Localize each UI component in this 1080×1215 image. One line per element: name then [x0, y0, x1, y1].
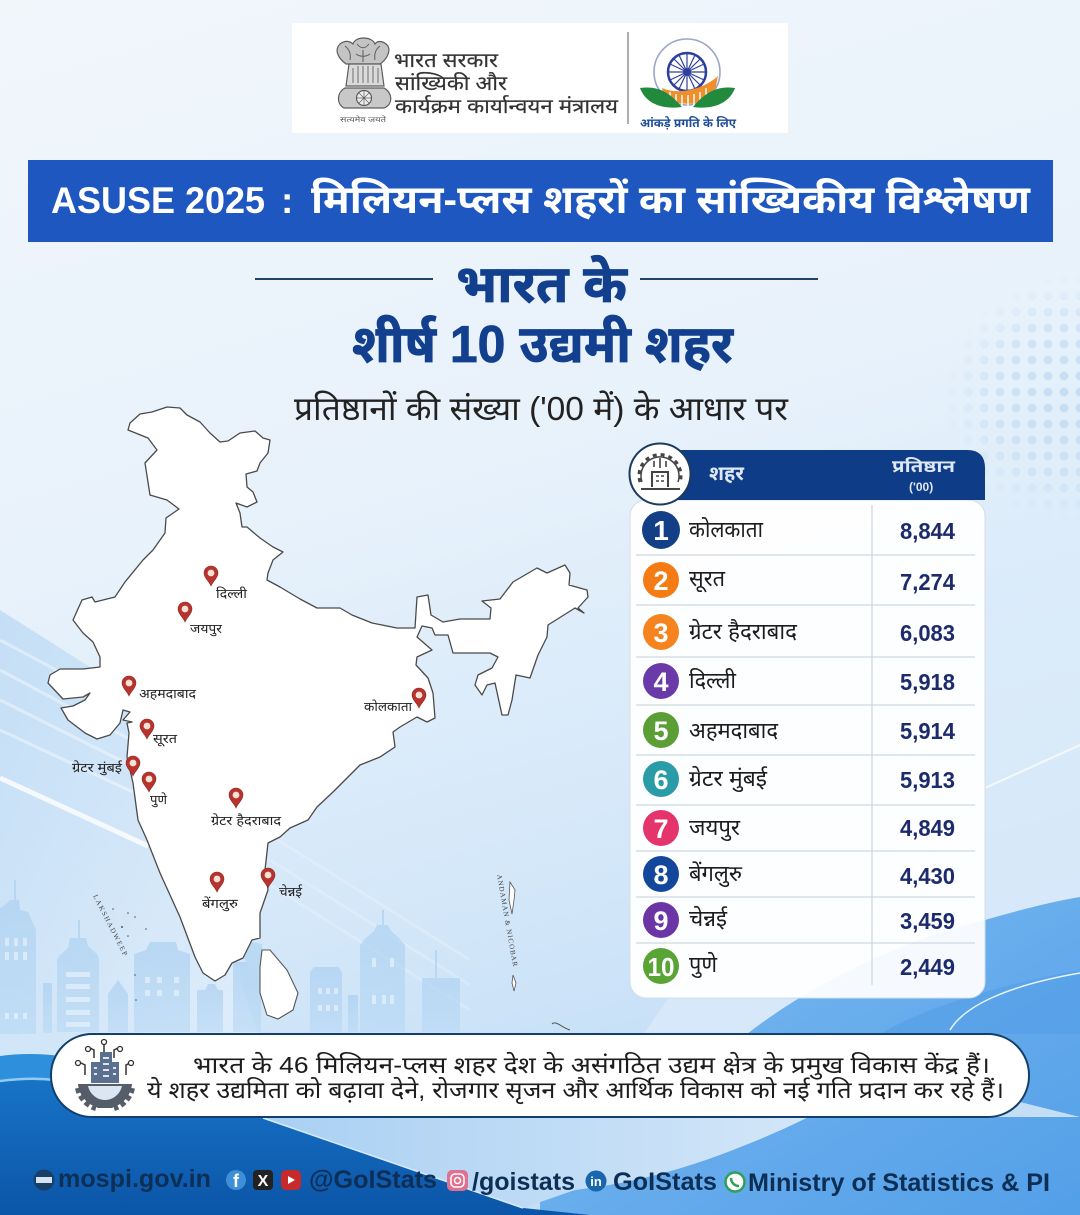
title banner: मिलियन-प्लस शहरों का सांख्यिकीय विश्लेषण	[311, 178, 1031, 222]
icon: smart city gear	[76, 1040, 134, 1108]
mainland outline	[48, 407, 588, 981]
main heading: भारत के	[456, 255, 628, 314]
row: Jaipur: 7	[653, 814, 669, 844]
row: Ahmedabad: अहमदाबाद	[689, 718, 778, 743]
Andaman label: ANDAMAN & NICOBAR	[495, 874, 519, 968]
city labels: ग्रेटर मुंबई	[72, 760, 123, 776]
table header	[670, 450, 985, 500]
row: Surat: सूरत	[689, 566, 725, 593]
icon: linkedin: in	[590, 1174, 602, 1189]
row: Delhi	[643, 663, 955, 699]
row: Greater Hyderabad: 3	[653, 618, 669, 648]
table card	[630, 500, 985, 998]
row: Delhi: 4	[653, 667, 669, 697]
header logo strip	[292, 23, 788, 133]
Andaman islands	[509, 882, 516, 991]
table header: प्रतिष्ठान	[892, 456, 956, 476]
social footer: mospi.gov.in	[58, 1165, 211, 1193]
callout text: भारत के 46 मिलियन-प्लस शहर देश के असंगठित उद्यम क्षेत्र के प्रमुख विकास केंद्र हैं।	[193, 1052, 990, 1080]
city labels: कोलकाता	[364, 699, 413, 714]
row: Delhi: 5,918	[900, 669, 955, 695]
row: Jaipur: 4,849	[900, 815, 955, 841]
social footer: Ministry of Statistics & PI	[748, 1169, 1050, 1197]
icon: facebook	[226, 1170, 246, 1191]
icon: whatsapp	[726, 1172, 744, 1192]
row: Greater Hyderabad: ग्रेटर हैदराबाद	[689, 618, 797, 644]
skyline windows	[5, 938, 394, 1027]
emblem motto: सत्यमेव जयते	[340, 115, 387, 124]
row: Surat: 7,274	[900, 569, 955, 595]
city labels: अहमदाबाद	[139, 686, 197, 701]
row: Greater Mumbai	[643, 761, 955, 797]
city labels: बेंगलुरु	[202, 896, 238, 912]
row: Greater Mumbai: 5,913	[900, 767, 955, 793]
skyline	[0, 880, 460, 1034]
callout text: ये शहर उद्यमिता को बढ़ावा देने, रोजगार सृजन और आर्थिक विकास को नई गति प्रदान कर रहे हैं।	[147, 1077, 1004, 1105]
city labels	[72, 586, 413, 912]
Palk strait patch	[244, 942, 262, 975]
row: Surat: 2	[653, 566, 669, 596]
row: Kolkata: 1	[653, 515, 669, 546]
city labels: सूरत	[153, 731, 178, 747]
social footer: GoIStats	[613, 1168, 717, 1196]
logo tagline: आंकड़े प्रगति के लिए	[640, 115, 737, 130]
title banner: :	[281, 180, 293, 221]
icon: web	[34, 1170, 54, 1190]
background	[0, 292, 1080, 1215]
social footer: /goistats	[472, 1168, 575, 1196]
row: Chennai	[643, 902, 955, 938]
row: Ahmedabad: 5,914	[900, 718, 955, 744]
row: Chennai: 3,459	[900, 908, 955, 934]
table header: ('00)	[909, 480, 933, 494]
Sri Lanka	[260, 950, 298, 1019]
row: Delhi: दिल्ली	[689, 668, 736, 693]
row: Kolkata: कोलकाता	[689, 517, 763, 542]
row: Surat	[643, 562, 955, 598]
row: Pune: 2,449	[900, 954, 955, 980]
title banner	[28, 160, 1053, 242]
row: Pune: पुणे	[689, 951, 718, 979]
row: Greater Mumbai: 6	[653, 765, 669, 795]
ministry name: भारत सरकार	[394, 50, 499, 72]
row: Greater Hyderabad	[643, 614, 955, 650]
city labels: पुणे	[150, 792, 168, 808]
row: Greater Mumbai: ग्रेटर मुंबई	[689, 765, 768, 793]
icon: X	[253, 1170, 273, 1190]
takeaway callout	[51, 1034, 1029, 1117]
social footer	[34, 1165, 1050, 1197]
row: Ahmedabad	[643, 712, 955, 748]
city pins	[122, 566, 426, 892]
row: Chennai: 9	[653, 906, 669, 936]
main heading	[255, 255, 818, 374]
icon: MoSPI wheel logo	[640, 39, 735, 108]
icon: youtube	[281, 1170, 301, 1190]
subtitle: प्रतिष्ठानों की संख्या ('00 में) के आधार पर	[294, 389, 788, 427]
city labels: चेन्नई	[279, 884, 303, 899]
icon: facebook: f	[233, 1171, 240, 1191]
Lakshadweep label: LAKSHADWEEP	[91, 893, 130, 958]
ministry name: कार्यक्रम कार्यान्वयन मंत्रालय	[395, 95, 618, 118]
row: Kolkata: 8,844	[900, 518, 955, 544]
row: Ahmedabad: 5	[653, 716, 669, 746]
row: Bengaluru: बेंगलुरु	[689, 861, 743, 888]
icon: X: X	[258, 1173, 269, 1190]
social footer: @GoIStats	[309, 1166, 437, 1194]
row: Jaipur: जयपुर	[689, 815, 741, 842]
ministry name: सांख्यिकी और	[395, 71, 508, 95]
city labels: जयपुर	[190, 621, 223, 637]
icon: national emblem	[337, 38, 391, 108]
row: Pune: 10	[648, 952, 674, 982]
row: Jaipur	[643, 810, 955, 846]
icon: instagram	[447, 1170, 468, 1191]
main heading: शीर्ष 10 उद्यमी शहर	[352, 315, 734, 374]
Lakshadweep islands	[112, 908, 147, 1001]
icon: linkedin	[586, 1170, 606, 1192]
city labels: ग्रेटर हैदराबाद	[211, 813, 282, 828]
ranking table	[630, 444, 985, 998]
map of India	[48, 407, 588, 1030]
city labels: दिल्ली	[216, 586, 248, 601]
ministry name	[394, 50, 618, 118]
row: Bengaluru: 4,430	[900, 863, 955, 889]
row: Bengaluru: 8	[653, 860, 669, 890]
row: Chennai: चेन्नई	[689, 905, 728, 931]
callout text	[147, 1052, 1004, 1105]
title banner: ASUSE 2025	[51, 180, 265, 221]
row: Bengaluru	[643, 856, 955, 892]
icon: gear with building	[630, 444, 690, 504]
row: Greater Hyderabad: 6,083	[900, 620, 955, 646]
row: Kolkata	[642, 511, 955, 549]
row: Pune	[643, 948, 955, 984]
table header: शहर	[709, 463, 745, 485]
